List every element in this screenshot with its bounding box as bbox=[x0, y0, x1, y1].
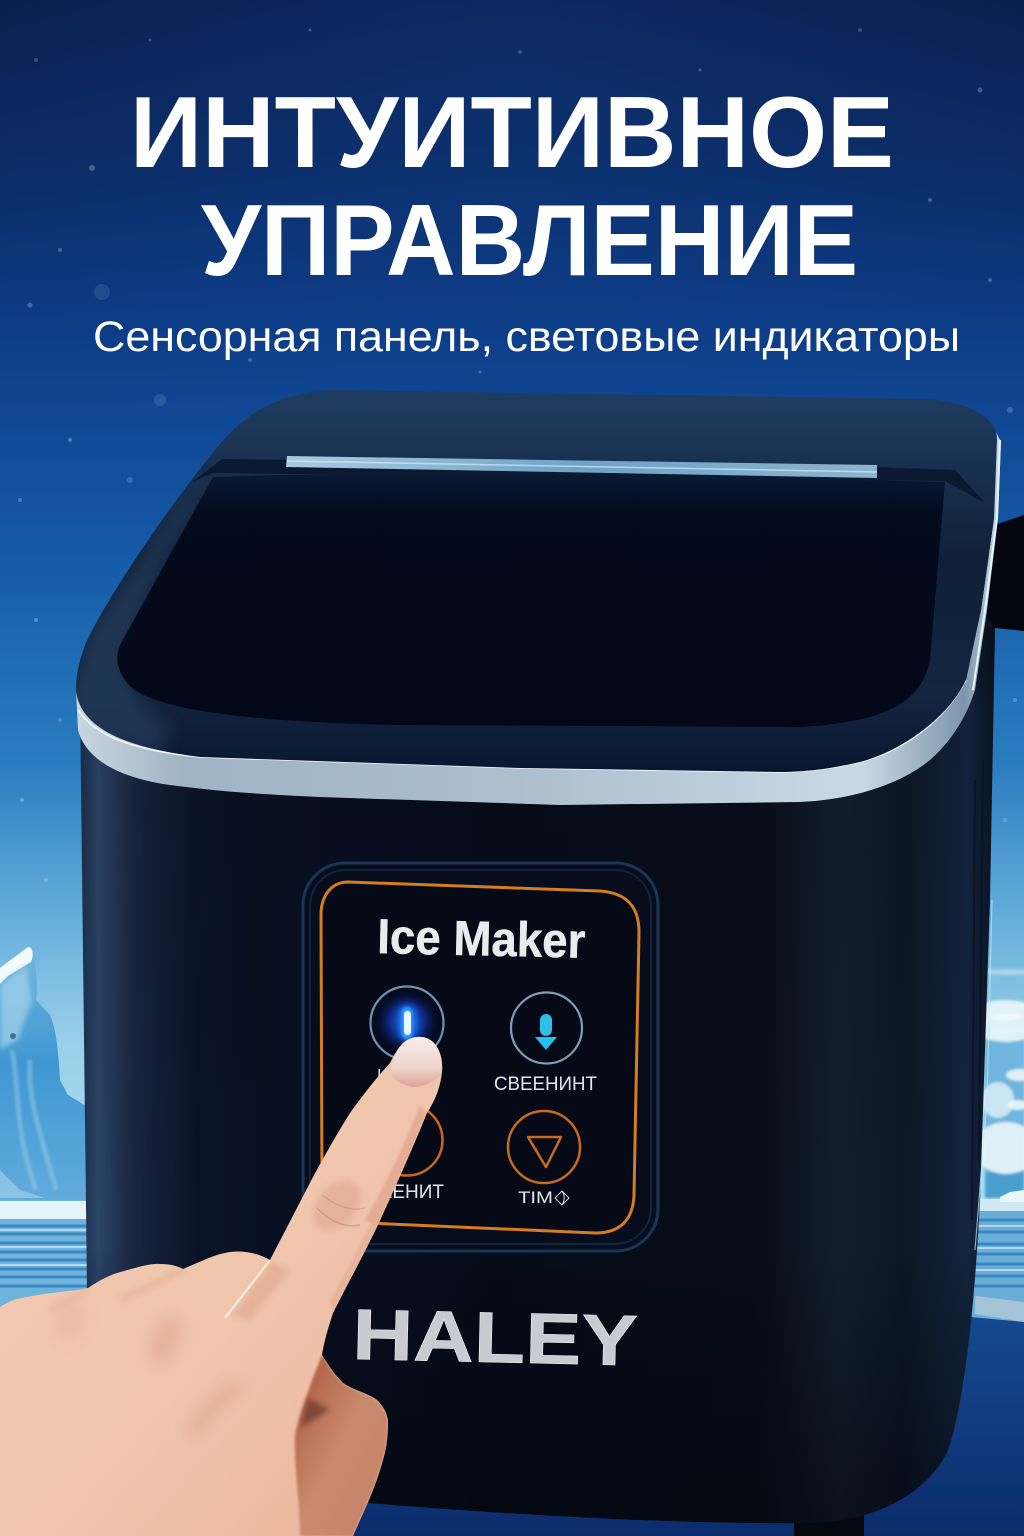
button 1 with blue glow bbox=[370, 986, 444, 1060]
sea and ice shelf bbox=[0, 1190, 1024, 1536]
button 3 label: СВЕЕНИТ bbox=[353, 1182, 444, 1203]
subtitle: Сенсорная панель, световые индикаторы bbox=[93, 313, 960, 361]
icon: small diamond leaf bbox=[555, 1191, 569, 1205]
panel orange frame bbox=[321, 882, 639, 1233]
button 1 label: ИНИТ bbox=[377, 1066, 427, 1086]
machine body bbox=[80, 600, 995, 1523]
lid bbox=[70, 390, 997, 772]
silver trim band bbox=[76, 432, 1001, 805]
button 2 bbox=[511, 992, 582, 1064]
button 3 bbox=[372, 1104, 442, 1176]
title: УПРАВЛЕНИЕ bbox=[201, 185, 858, 297]
hand base bbox=[0, 1037, 442, 1536]
control panel bbox=[303, 863, 658, 1251]
clouds right bbox=[974, 969, 1024, 1198]
title: ИНТУИТИВНОЕ bbox=[130, 77, 894, 189]
ice maker machine bbox=[70, 390, 1001, 1523]
background: falling snow bbox=[18, 28, 1017, 882]
brand logo: HALEY bbox=[352, 1295, 638, 1381]
hand shading bbox=[49, 1105, 427, 1536]
lid hinge recess bbox=[192, 459, 985, 503]
fingernail bbox=[390, 1037, 442, 1087]
title bbox=[130, 77, 894, 297]
button 4 bbox=[508, 1111, 580, 1183]
machine foot bbox=[794, 1512, 864, 1536]
button 4 label: ТIМ bbox=[518, 1188, 553, 1207]
panel title: Ice Maker bbox=[377, 910, 586, 969]
button 2 label: СВЕЕНИНТ bbox=[494, 1074, 597, 1095]
iceberg left bbox=[0, 947, 88, 1202]
machine handle bbox=[980, 515, 1024, 640]
lid window bbox=[117, 474, 945, 727]
hinge bar bbox=[286, 456, 877, 478]
hand pointing at button bbox=[0, 1037, 442, 1536]
panel bezel bbox=[303, 863, 658, 1251]
